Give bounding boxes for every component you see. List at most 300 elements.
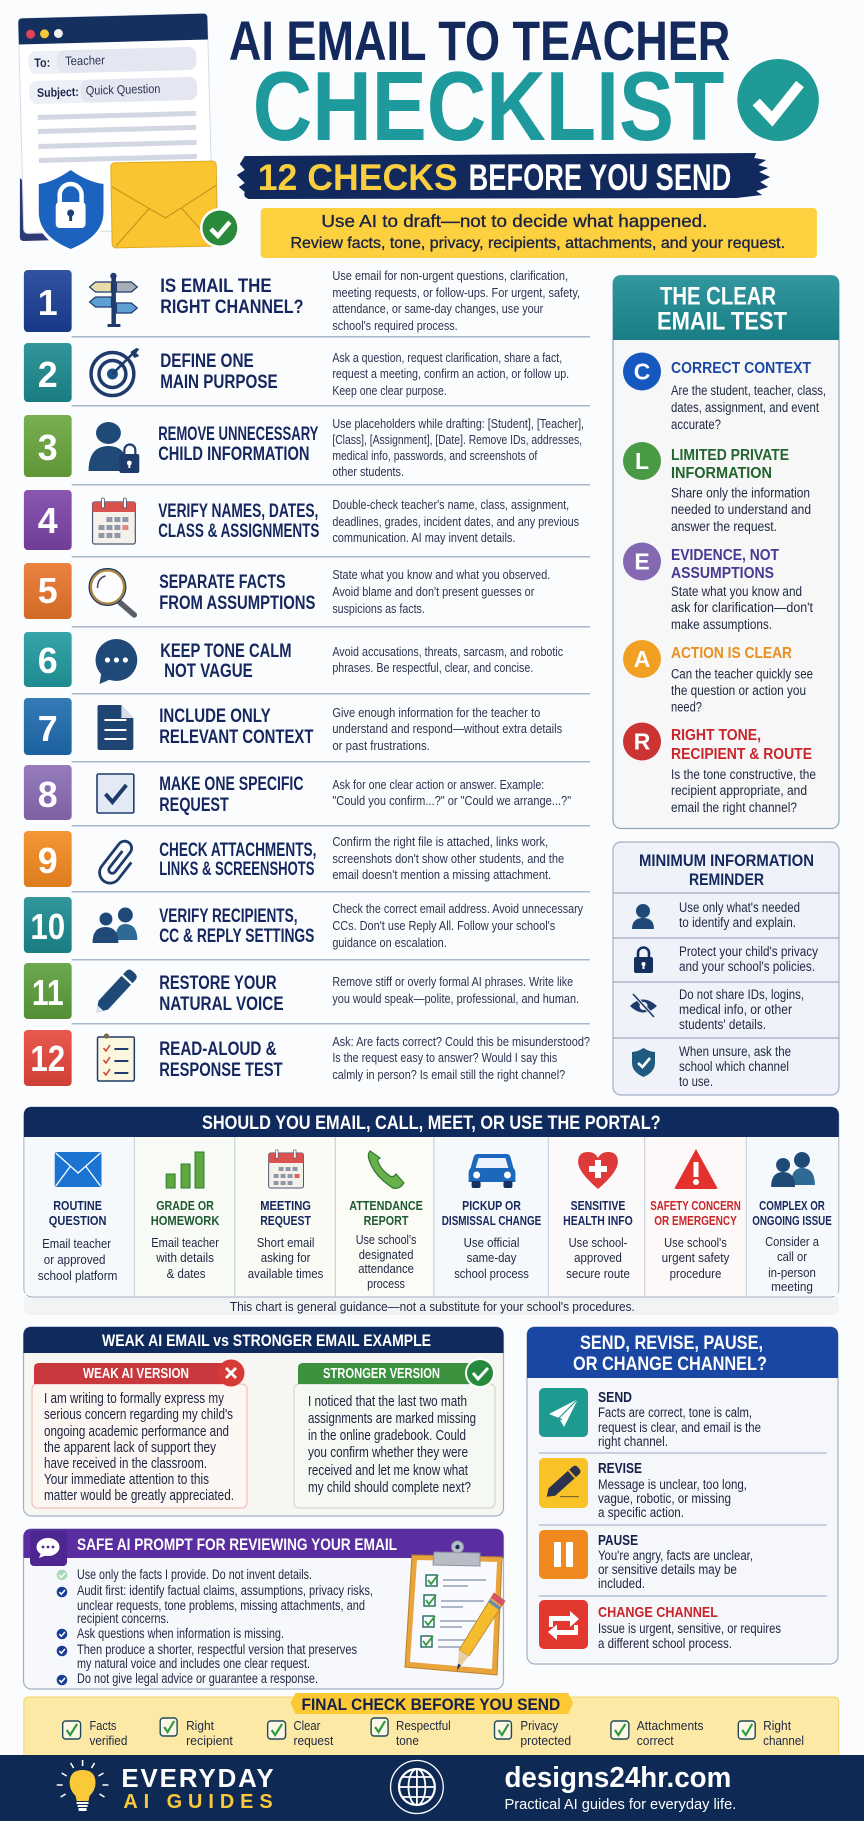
- number badge 3: 3: [38, 427, 58, 468]
- column: pickup or dismissal change: [442, 1154, 541, 1281]
- reminder: privacy: and your school's policies.: [679, 959, 815, 974]
- column: complex or ongoing issue: COMPLEX OR: [759, 1199, 825, 1213]
- item: attachments correct: Attachments: [637, 1719, 703, 1733]
- weak version: serious concern regarding my child's: [44, 1407, 233, 1423]
- icon: target: [91, 348, 139, 396]
- heading 6: NOT VAGUE: [164, 660, 253, 682]
- R: right tone, recipient & route: recipient appropriate, and: [671, 783, 807, 798]
- column: pickup or dismissal change: PICKUP OR: [462, 1199, 521, 1213]
- option: change channel: a different school process.: [598, 1636, 732, 1651]
- reminder: identify: to identify and explain.: [679, 915, 796, 930]
- weak version: matter would be greatly appreciated.: [44, 1488, 234, 1504]
- item: right recipient: Right: [186, 1719, 214, 1733]
- check 4: [24, 490, 580, 550]
- reminder: privacy: [634, 944, 818, 974]
- panel: weak vs stronger email example: [24, 1327, 504, 1516]
- C: correct context: CORRECT CONTEXT: [671, 360, 811, 377]
- item: respectful tone: tone: [396, 1734, 419, 1748]
- R: right tone, recipient & route: RIGHT TONE,: [671, 727, 761, 744]
- heading 8: MAKE ONE SPECIFIC: [159, 773, 303, 795]
- description 12: Ask: Are facts correct? Could this be misunderstood?: [332, 1034, 590, 1049]
- weak version: I am writing to formally express my: [44, 1391, 225, 1407]
- option: revise: [539, 1458, 747, 1520]
- E: evidence, not assumptions: EVIDENCE, NOT: [671, 547, 779, 564]
- heading 7: INCLUDE ONLY: [159, 705, 271, 727]
- column: routine question: or approved: [44, 1253, 106, 1267]
- C: correct context: dates, assignment, and event: [671, 400, 819, 415]
- prompt checklist: [57, 1567, 373, 1686]
- icon: paperclip: [95, 838, 140, 887]
- option: change channel: CHANGE CHANNEL: [598, 1604, 718, 1621]
- prompt checklist: Use only the facts I provide. Do not invent details.: [77, 1567, 312, 1582]
- shield with lock: [36, 166, 106, 253]
- number badge 10: [24, 897, 72, 953]
- description 11: Remove stiff or overly formal AI phrases. Write like: [332, 974, 573, 989]
- column: routine question: school platform: [38, 1269, 117, 1283]
- heading 7: [159, 705, 314, 748]
- heading 11: [159, 972, 284, 1015]
- number badge 2: 2: [38, 354, 58, 395]
- check 6: [24, 632, 564, 687]
- panel heading: OR CHANGE CHANNEL?: [573, 1353, 767, 1375]
- column: safety concern or emergency: procedure: [670, 1267, 721, 1281]
- option: pause: or sensitive details may be: [598, 1562, 737, 1577]
- description 11: [332, 974, 579, 1006]
- description 8: Ask for one clear action or answer. Example:: [332, 777, 544, 792]
- callout: use AI to draft: Use AI to draft—not to decide what happened.: [321, 211, 707, 231]
- R: right tone, recipient & route: [623, 722, 816, 815]
- number badge 1: 1: [38, 282, 58, 323]
- column: safety concern or emergency: OR EMERGENCY: [654, 1214, 737, 1228]
- stronger version: my child should complete next?: [308, 1480, 471, 1496]
- number badge 5: [24, 563, 72, 619]
- stronger version: in the online gradebook. Could: [308, 1428, 466, 1444]
- column: safety concern or emergency: SAFETY CONCERN: [650, 1199, 741, 1213]
- heading 3: REMOVE UNNECESSARY: [158, 423, 318, 445]
- description 6: Avoid accusations, threats, sarcasm, and robotic: [332, 644, 564, 659]
- L: limited private information: answer the request.: [671, 519, 777, 534]
- column: sensitive health info: Use school-: [569, 1236, 627, 1250]
- description 9: screenshots don't show other students, and the: [332, 851, 564, 866]
- heading 2: MAIN PURPOSE: [160, 371, 278, 393]
- column: routine question: ROUTINE: [53, 1199, 102, 1213]
- column: meeting request: available times: [248, 1267, 323, 1281]
- panel: the clear email test: [613, 276, 839, 828]
- prompt checklist: Audit first: identify factual claims, assumptions, privacy risks,: [77, 1583, 373, 1598]
- number badge 10: 10: [30, 906, 65, 947]
- description 2: request a meeting, confirm an action, or follow up.: [332, 366, 569, 381]
- prompt checklist: Ask questions when information is missing.: [77, 1626, 284, 1641]
- description 3: [Class], [Assignment], [Date]. Remove IDs, addresses,: [332, 432, 582, 447]
- E: evidence, not assumptions: ASSUMPTIONS: [671, 565, 774, 582]
- description 3: [332, 416, 584, 479]
- heading 4: CLASS & ASSIGNMENTS: [158, 520, 319, 542]
- stronger version: assignments are marked missing: [308, 1411, 476, 1427]
- description 3: medical info, passwords, and screenshots of: [332, 448, 538, 463]
- column: pickup or dismissal change: DISMISSAL CHANGE: [442, 1214, 541, 1228]
- icon: chat badge: [30, 1531, 67, 1566]
- A: action is clear: need?: [671, 700, 702, 714]
- check 3: [24, 415, 584, 479]
- heading 4: VERIFY NAMES, DATES,: [158, 500, 318, 522]
- prompt checklist: unclear requests, tone problems, missing attachments, and: [77, 1598, 365, 1613]
- prompt checklist: Do not give legal advice or guarantee a response.: [77, 1671, 318, 1686]
- column: complex or ongoing issue: meeting: [771, 1280, 813, 1294]
- icon: checklist: [98, 1033, 134, 1081]
- icon: magnifying glass: [89, 568, 134, 615]
- heading 8: REQUEST: [159, 794, 229, 816]
- icon: light bulb: [57, 1760, 108, 1811]
- number badge 8: [24, 765, 72, 820]
- item: clear request: request: [294, 1734, 334, 1748]
- weak version: ongoing academic performance and: [44, 1424, 229, 1440]
- item: privacy protected: protected: [520, 1734, 571, 1748]
- C: correct context: Are the student, teacher, class,: [671, 383, 826, 398]
- column: sensitive health info: HEALTH INFO: [563, 1214, 633, 1228]
- check 7: [24, 698, 563, 755]
- column: complex or ongoing issue: ONGOING ISSUE: [752, 1214, 832, 1228]
- R: right tone, recipient & route: RECIPIENT & ROUTE: [671, 746, 812, 763]
- option: send: request is clear, and email is the: [598, 1420, 761, 1435]
- column: grade or homework: HOMEWORK: [151, 1214, 219, 1228]
- description 12: Is the request easy to answer? Would I say this: [332, 1050, 558, 1065]
- option: pause: included.: [598, 1576, 645, 1591]
- weak version: WEAK AI VERSION: [83, 1366, 189, 1382]
- icon: signpost: [90, 273, 137, 327]
- number badge 9: 9: [38, 840, 58, 881]
- website: designs24hr.com: [504, 1762, 731, 1794]
- brand name: AI GUIDES: [123, 1791, 273, 1813]
- email window: To:: [34, 56, 50, 70]
- heading 5: FROM ASSUMPTIONS: [159, 592, 315, 614]
- option: send: Facts are correct, tone is calm,: [598, 1405, 752, 1420]
- stronger version: I noticed that the last two math: [308, 1394, 467, 1410]
- column: attendance report: [349, 1151, 423, 1291]
- email window: Subject:: [37, 85, 79, 100]
- heading 10: [159, 905, 314, 947]
- description 10: Check the correct email address. Avoid unnecessary: [332, 901, 584, 916]
- icon: teal check circle: [737, 59, 819, 141]
- column: meeting request: MEETING: [260, 1199, 311, 1213]
- item: right channel: [738, 1719, 804, 1748]
- description 2: Ask a question, request clarification, share a fact,: [332, 350, 562, 365]
- header illustration: email window with shield and envelope: [18, 14, 240, 253]
- column: attendance report: designated: [359, 1248, 413, 1262]
- dark envelope behind window: [20, 178, 60, 241]
- column: safety concern or emergency: urgent safety: [662, 1251, 730, 1265]
- C: correct context: accurate?: [671, 417, 721, 432]
- L: limited private information: [623, 442, 811, 534]
- column: safety concern or emergency: [650, 1149, 741, 1281]
- heading 1: RIGHT CHANNEL?: [160, 296, 303, 318]
- number badge 6: [24, 632, 72, 687]
- R: right tone, recipient & route: Is the tone constructive, the: [671, 767, 816, 782]
- column: meeting request: [248, 1150, 323, 1281]
- icon: document: [98, 705, 133, 750]
- item: right recipient: recipient: [186, 1734, 233, 1748]
- number badge 1: [24, 270, 72, 332]
- heading 6: [160, 640, 292, 682]
- icon: two people: [93, 908, 137, 943]
- description 4: [332, 497, 580, 545]
- heading 6: KEEP TONE CALM: [160, 640, 292, 662]
- column: sensitive health info: approved: [574, 1251, 622, 1265]
- email window: Teacher: [65, 53, 105, 68]
- prompt checklist: my natural voice and includes one clear request.: [77, 1656, 310, 1671]
- number badge 12: 12: [30, 1038, 65, 1079]
- column: meeting request: REQUEST: [260, 1214, 311, 1228]
- column: routine question: Email teacher: [42, 1237, 111, 1251]
- number badge 6: 6: [38, 640, 58, 681]
- option: send: [539, 1388, 761, 1449]
- prompt checklist: recipient concerns.: [77, 1611, 169, 1626]
- heading 10: CC & REPLY SETTINGS: [159, 925, 314, 947]
- number badge 7: 7: [38, 708, 58, 749]
- check 9: [24, 831, 564, 887]
- number badge 4: 4: [38, 500, 58, 541]
- check 11: [24, 963, 579, 1019]
- E: evidence, not assumptions: [623, 542, 813, 632]
- brand name: [121, 1765, 274, 1813]
- E: evidence, not assumptions: ask for clarification—don't: [671, 600, 813, 615]
- L: limited private information: LIMITED PRIVATE: [671, 447, 789, 464]
- heading 7: RELEVANT CONTEXT: [159, 726, 314, 748]
- number badge 11: [24, 963, 72, 1019]
- item: right recipient: [160, 1718, 233, 1748]
- panel heading: WEAK AI EMAIL vs STRONGER EMAIL EXAMPLE: [102, 1331, 431, 1350]
- item: privacy protected: [495, 1719, 571, 1748]
- number badge 2: [24, 343, 72, 402]
- option: revise: Message is unclear, too long,: [598, 1477, 747, 1492]
- item: clear request: [268, 1719, 334, 1748]
- column: complex or ongoing issue: in-person: [768, 1266, 816, 1280]
- description 8: "Could you confirm...?" or "Could we arrange...?": [332, 793, 571, 808]
- number badge 8: 8: [38, 774, 58, 815]
- option: revise: a specific action.: [598, 1505, 684, 1520]
- email window: Quick Question: [86, 82, 161, 98]
- heading 5: [159, 571, 315, 614]
- column: pickup or dismissal change: same-day: [467, 1251, 517, 1265]
- description 8: [332, 777, 571, 808]
- column: meeting request: Short email: [257, 1236, 314, 1250]
- number badge 11: 11: [32, 972, 64, 1013]
- callout: use AI to draft: [261, 208, 817, 258]
- R: right tone, recipient & route: email the right channel?: [671, 800, 797, 815]
- column: safety concern or emergency: Use school's: [664, 1236, 727, 1250]
- check 5: [24, 563, 550, 619]
- L: limited private information: INFORMATION: [671, 465, 772, 482]
- heading 12: RESPONSE TEST: [159, 1059, 283, 1081]
- description 10: CCs. Don't use Reply All. Follow your school's: [332, 918, 556, 933]
- description 2: Keep one clear purpose.: [332, 383, 447, 398]
- panel: safe AI prompt: [24, 1529, 505, 1689]
- description 6: phrases. Be respectful, clear, and concise.: [332, 660, 533, 675]
- description 1: attendance, or same-day changes, use your: [332, 301, 544, 316]
- description 3: other students.: [332, 464, 404, 479]
- check 12: [24, 1030, 590, 1086]
- C: correct context: C: [634, 358, 650, 384]
- column: grade or homework: [151, 1152, 219, 1281]
- panel: minimum information reminder: [613, 842, 839, 1095]
- reminder: when unsure: school which channel: [679, 1059, 789, 1074]
- description 12: [332, 1034, 590, 1082]
- icon: globe: [391, 1760, 443, 1814]
- heading 2: [160, 350, 278, 393]
- option: change channel: Issue is urgent, sensitive, or requires: [598, 1621, 781, 1636]
- A: action is clear: ACTION IS CLEAR: [671, 645, 792, 662]
- column: complex or ongoing issue: [752, 1152, 832, 1294]
- reminder: when unsure: When unsure, ask the: [679, 1044, 791, 1059]
- number badge 5: 5: [38, 570, 58, 611]
- heading 5: SEPARATE FACTS: [159, 571, 286, 593]
- description 5: [332, 567, 550, 616]
- panel: 12 checks list: [24, 268, 590, 1086]
- option: send: SEND: [598, 1389, 632, 1406]
- column: attendance report: process: [367, 1277, 405, 1291]
- footnote bar: This chart is general guidance—not a substitute for your school's procedures.: [230, 1299, 635, 1314]
- weak version: [32, 1360, 247, 1508]
- prompt checklist: Then produce a shorter, respectful version that preserves: [77, 1642, 357, 1657]
- brand name: EVERYDAY: [121, 1765, 274, 1793]
- description 1: [332, 268, 580, 333]
- reminder: identify: [632, 900, 800, 930]
- A: action is clear: [623, 640, 813, 714]
- option: send: right channel.: [598, 1434, 668, 1449]
- heading 3: [158, 423, 318, 465]
- footer: [0, 1755, 864, 1821]
- callout: use AI to draft: Review facts, tone, privacy, recipients, attachments, and your request.: [291, 235, 785, 252]
- yellow envelope: [111, 161, 218, 248]
- panel: send, revise, pause, or change channel: [527, 1327, 838, 1664]
- description 4: deadlines, grades, incident dates, and any previous: [332, 514, 580, 529]
- subtitle banner: BEFORE YOU SEND: [469, 157, 731, 198]
- panel heading: [573, 1332, 767, 1375]
- item: respectful tone: Respectful: [396, 1719, 451, 1733]
- number badge 12: [24, 1030, 72, 1086]
- reminder: do not share: students' details.: [679, 1017, 766, 1032]
- description 3: Use placeholders while drafting: [Student], [Teacher],: [332, 416, 584, 431]
- panel heading: REMINDER: [689, 870, 764, 889]
- heading 9: CHECK ATTACHMENTS,: [159, 839, 316, 861]
- C: correct context: [623, 352, 826, 432]
- option: revise: REVISE: [598, 1460, 642, 1477]
- item: attachments correct: correct: [637, 1734, 674, 1748]
- item: clear request: Clear: [294, 1719, 320, 1733]
- heading 8: [159, 773, 303, 816]
- weak version: Your immediate attention to this: [44, 1472, 209, 1488]
- item: facts verified: Facts: [90, 1719, 116, 1733]
- L: limited private information: L: [635, 448, 649, 474]
- description 5: State what you know and what you observed.: [332, 567, 550, 582]
- weak version: the apparent lack of support they: [44, 1440, 217, 1456]
- panel heading: EMAIL TEST: [657, 308, 787, 336]
- heading 11: RESTORE YOUR: [159, 972, 277, 994]
- E: evidence, not assumptions: make assumptions.: [671, 617, 772, 632]
- column: pickup or dismissal change: school process: [454, 1267, 529, 1281]
- footnote bar: [24, 1297, 839, 1315]
- final check heading: FINAL CHECK BEFORE YOU SEND: [301, 1695, 560, 1714]
- item: attachments correct: [611, 1719, 703, 1748]
- column: grade or homework: & dates: [167, 1267, 205, 1281]
- reminder: privacy: Protect your child's privacy: [679, 944, 818, 959]
- icon: person with lock: [89, 422, 139, 473]
- number badge 4: [24, 490, 72, 550]
- description 2: [332, 350, 569, 398]
- description 7: or past frustrations.: [332, 738, 430, 753]
- heading 1: IS EMAIL THE: [160, 275, 272, 297]
- number badge 9: [24, 831, 72, 887]
- description 9: email doesn't mention a missing attachment.: [332, 867, 551, 882]
- description 1: Use email for non-urgent questions, clarification,: [332, 268, 568, 283]
- stronger version: STRONGER VERSION: [323, 1366, 440, 1382]
- item: respectful tone: [371, 1718, 451, 1748]
- E: evidence, not assumptions: E: [634, 548, 650, 574]
- column: routine question: QUESTION: [49, 1214, 106, 1228]
- reminder: when unsure: [632, 1044, 791, 1089]
- A: action is clear: A: [634, 646, 650, 672]
- column: routine question: [38, 1152, 117, 1283]
- A: action is clear: Can the teacher quickly see: [671, 666, 813, 682]
- column: sensitive health info: SENSITIVE: [571, 1199, 625, 1213]
- description 5: suspicions as facts.: [332, 601, 425, 616]
- icon: calendar: [93, 498, 135, 544]
- heading 10: VERIFY RECIPIENTS,: [159, 905, 298, 927]
- check 8: [24, 765, 571, 820]
- description 11: you would speak—polite, professional, and human.: [332, 991, 579, 1006]
- panel heading: SHOULD YOU EMAIL, CALL, MEET, OR USE THE PORTAL?: [202, 1113, 661, 1134]
- description 10: [332, 901, 584, 950]
- reminder: when unsure: to use.: [679, 1074, 713, 1089]
- description 4: communication. AI may invent details.: [332, 530, 515, 545]
- stronger version: received and let me know what: [308, 1463, 468, 1479]
- description 1: school's required process.: [332, 318, 458, 333]
- title: Checklist: CHECKLIST: [253, 52, 724, 161]
- reminder: do not share: Do not share IDs, logins,: [679, 987, 804, 1002]
- description 7: Give enough information for the teacher to: [332, 705, 540, 720]
- description 1: meeting requests, or follow-ups. For urgent, safety,: [332, 285, 580, 300]
- panel: final check before you send: [24, 1693, 839, 1757]
- heading 12: [159, 1038, 283, 1081]
- green check badge: [200, 208, 240, 248]
- item: right channel: Right: [763, 1719, 792, 1733]
- icon: pencil: [92, 968, 138, 1017]
- description 7: understand and respond—without extra details: [332, 721, 563, 736]
- item: facts verified: [63, 1719, 127, 1748]
- heading 11: NATURAL VOICE: [159, 993, 284, 1015]
- option: revise: vague, robotic, or missing: [598, 1491, 731, 1506]
- column: meeting request: asking for: [261, 1251, 310, 1265]
- stronger version: you confirm whether they were: [308, 1445, 468, 1461]
- column: grade or homework: Email teacher: [151, 1236, 219, 1250]
- title: AI Email to Teacher: AI EMAIL TO TEACHER: [229, 9, 730, 72]
- item: facts verified: verified: [90, 1734, 127, 1748]
- heading 12: READ-ALOUD &: [159, 1038, 277, 1060]
- panel heading: [639, 851, 814, 889]
- heading 9: [159, 839, 316, 880]
- column: grade or homework: GRADE OR: [156, 1199, 214, 1213]
- description 9: [332, 834, 564, 882]
- illustration: clipboard and pencil: [405, 1541, 505, 1675]
- description 4: Double-check teacher's name, class, assignment,: [332, 497, 569, 512]
- reminder: do not share: medical info, or other: [679, 1002, 792, 1017]
- E: evidence, not assumptions: State what you know and: [671, 584, 802, 599]
- subtitle banner: [237, 153, 770, 199]
- icon: checkbox: [97, 774, 134, 813]
- option: pause: [539, 1530, 753, 1591]
- heading 2: DEFINE ONE: [160, 350, 254, 372]
- stronger version: [294, 1358, 495, 1508]
- column: sensitive health info: [563, 1152, 633, 1281]
